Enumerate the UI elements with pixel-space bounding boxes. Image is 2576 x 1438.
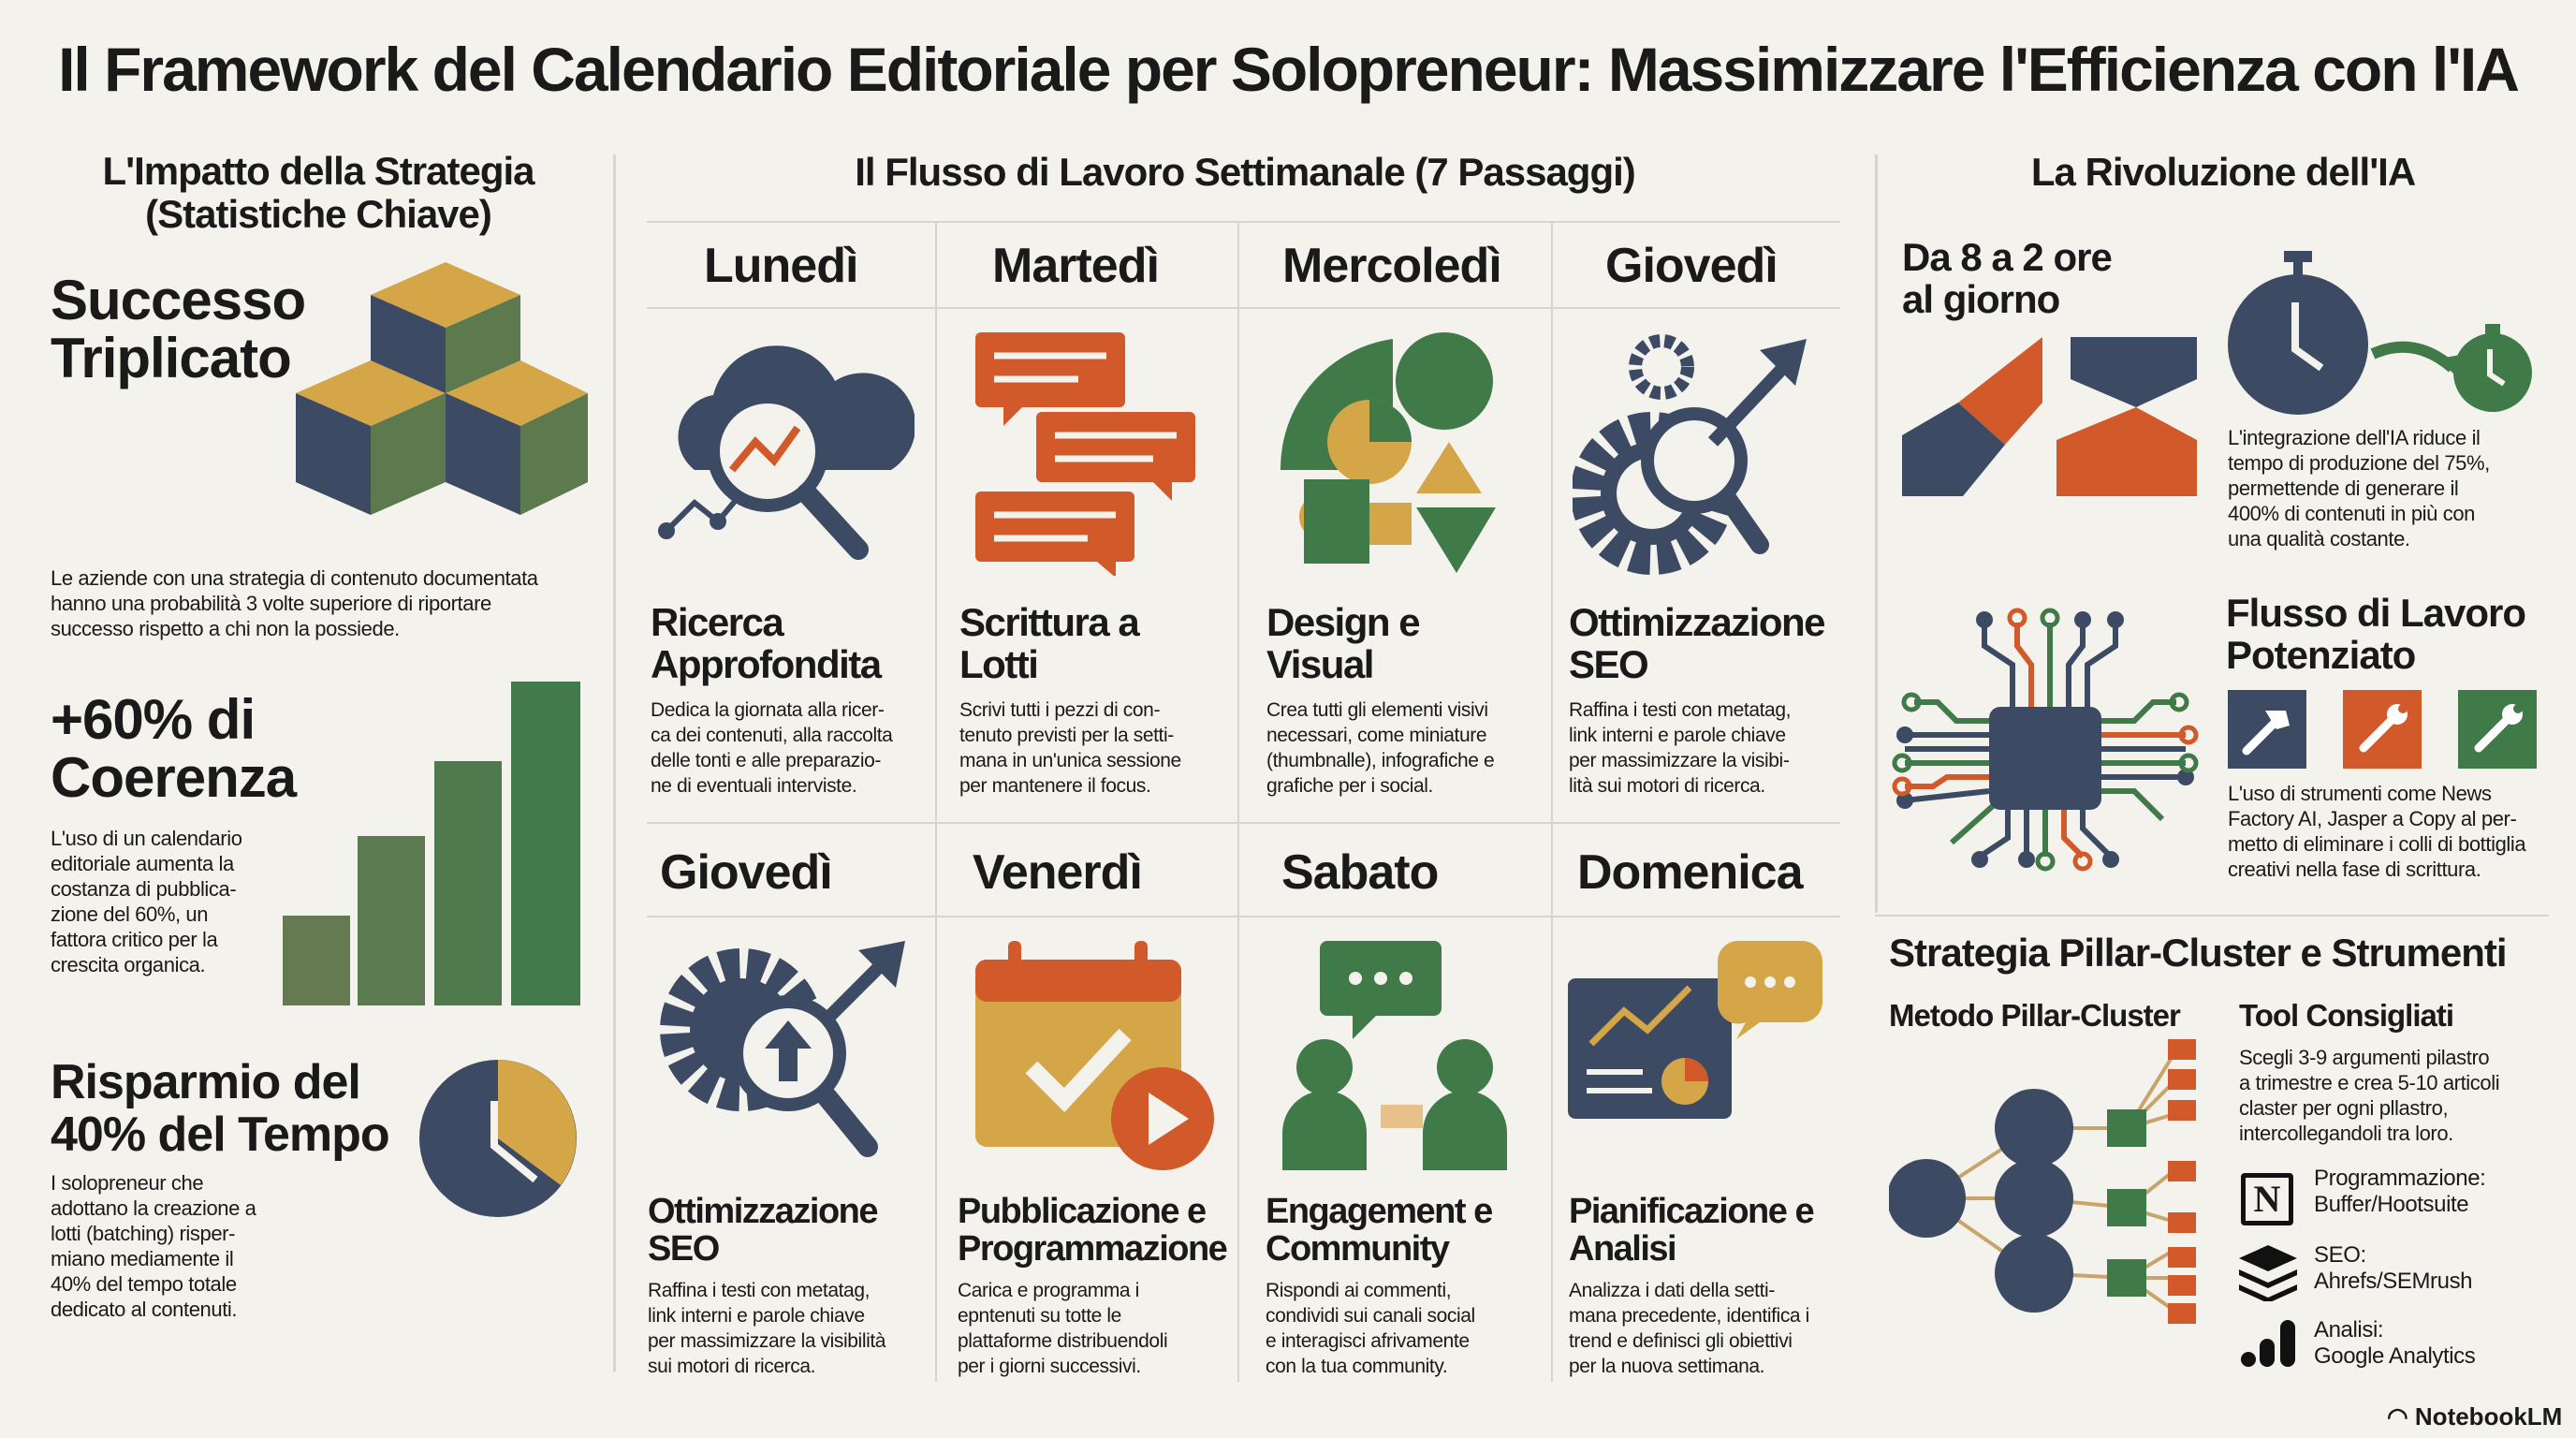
step titles row 1 <box>651 600 882 686</box>
text: IA riduce: L'integrazione dell'IA riduce il <box>2228 426 2481 449</box>
panel: weekly workflow: mana in un'unica sessione <box>959 750 1181 771</box>
step texts row 2: sui motori di ricerca. <box>648 1356 815 1377</box>
step texts row 1: ne di eventuali interviste. <box>651 775 856 797</box>
icon: analytics chat <box>1568 941 1822 1119</box>
panel: weekly workflow: lità sui motori di ricerca. <box>1569 775 1765 797</box>
tool list: Ahrefs/SEMrush <box>2314 1269 2472 1294</box>
panel: weekly workflow: necessari, come miniature <box>1266 725 1486 746</box>
text: coerenza: zione del 60%, un <box>51 902 208 926</box>
panel: weekly workflow: link interni e parole chiave <box>1569 725 1786 746</box>
heading: impatto <box>102 149 535 236</box>
text: successo: hanno una probabilità 3 volte superiore di riportare <box>51 592 491 615</box>
heading: flusso potenziato: Potenziato <box>2226 633 2415 677</box>
icon: gear seo <box>1573 334 1807 575</box>
step texts row 1: ca dei contenuti, alla raccolta <box>651 725 892 746</box>
heading: impatto: L'Impatto della Strategia <box>102 149 534 193</box>
panel: weekly workflow: per i giorni successivi. <box>958 1356 1141 1377</box>
panel: left stats <box>51 149 588 1321</box>
text: risparmio: I solopreneur che <box>51 1171 203 1195</box>
icon: stopwatches <box>2228 251 2532 415</box>
text: strumenti: creativi nella fase di scrittura. <box>2228 858 2481 881</box>
panel: weekly workflow: e interagisci afrivamente <box>1266 1330 1470 1352</box>
stat: successo triplicato: Triplicato <box>51 327 291 389</box>
text: coerenza: crescita organica. <box>51 953 205 976</box>
text: strumenti: L'uso di strumenti come News <box>2228 782 2492 805</box>
panel: weekly workflow: mana precedente, identifica i <box>1569 1305 1809 1327</box>
step texts row 2: link interni e parole chiave <box>648 1305 865 1327</box>
text: risparmio: dedicato al contenuti. <box>51 1298 237 1321</box>
icon: community <box>1282 941 1507 1170</box>
bar chart <box>283 682 580 1005</box>
panel: weekly workflow: Visual <box>1266 642 1373 686</box>
panel: weekly workflow: con la tua community. <box>1266 1356 1447 1377</box>
stat: risparmio: Risparmio del <box>51 1055 360 1109</box>
step titles row 1: Ricerca <box>651 600 783 644</box>
panel: weekly workflow: Programmazione <box>958 1229 1226 1269</box>
panel: AI revolution <box>1893 150 2537 881</box>
panel: weekly workflow: Design e <box>1266 600 1419 644</box>
icon: layers <box>2239 1245 2297 1301</box>
panel: weekly workflow: tenuto previsti per la setti- <box>959 725 1174 746</box>
panel: weekly workflow: Engagement e <box>1266 1192 1492 1231</box>
title: Il Framework del Calendario Editoriale per Solopreneur: Massimizzare l'Efficienza con l'IA <box>58 35 2518 104</box>
text: IA riduce: tempo di produzione del 75%, <box>2228 451 2490 475</box>
text: risparmio: adottano la creazione a <box>51 1196 256 1220</box>
logo: NotebookLM: ◠ NotebookLM <box>2387 1402 2562 1431</box>
step texts row 2 <box>648 1280 886 1377</box>
text: successo: successo rispetto a chi non la possiede. <box>51 617 400 640</box>
panel: weekly workflow: Scrivi tutti i pezzi di con- <box>959 699 1160 721</box>
step titles row 2 <box>648 1192 878 1269</box>
day headers row 1: Giovedì <box>1605 239 1778 293</box>
heading: impatto: (Statistiche Chiave) <box>145 192 491 236</box>
text: IA riduce: una qualità costante. <box>2228 527 2410 550</box>
text: pillar: intercollegandoli tra loro. <box>2239 1122 2453 1145</box>
icon: cubes <box>296 262 588 515</box>
panel: weekly workflow: Analizza i dati della setti- <box>1569 1280 1775 1301</box>
subheading: metodo: Metodo Pillar-Cluster <box>1889 998 2180 1033</box>
day headers row 1 <box>704 239 1778 293</box>
icon: hourglass shapes <box>1902 337 2197 496</box>
icon: analytics bars <box>2241 1320 2299 1367</box>
panel: pillar-cluster <box>1889 931 2507 1369</box>
icon: design shapes <box>1281 332 1496 573</box>
stat: risparmio: 40% del Tempo <box>51 1108 389 1162</box>
panel: weekly workflow: per massimizzare la visibi- <box>1569 750 1789 771</box>
day headers row 1: Martedì <box>992 239 1159 293</box>
icon: chip <box>1893 609 2198 871</box>
icon: notion: N <box>2254 1178 2280 1220</box>
subheading: tool consigliati: Tool Consigliati <box>2239 998 2453 1033</box>
step texts row 2: per massimizzare la visibilità <box>648 1330 886 1352</box>
step titles row 2: SEO <box>648 1229 719 1269</box>
icon: gear magnifier <box>660 941 905 1157</box>
text: coerenza: editoriale aumenta la <box>51 852 234 875</box>
panel: weekly workflow: Rispondi ai commenti, <box>1266 1280 1451 1301</box>
day headers row 2: Sabato <box>1281 845 1438 900</box>
stat: coerenza <box>51 688 298 809</box>
panel: weekly workflow: Lotti <box>959 642 1037 686</box>
heading: flusso potenziato: Flusso di Lavoro <box>2226 591 2525 635</box>
step texts row 1: delle tonti e alle preparazio- <box>651 750 881 771</box>
text: coerenza: L'uso di un calendario <box>51 827 242 850</box>
icon: cloud research <box>658 345 915 560</box>
panel: weekly workflow: grafiche per i social. <box>1266 775 1433 797</box>
icon: calendar publish <box>975 941 1214 1170</box>
text: pillar <box>2239 1046 2499 1145</box>
text: risparmio <box>51 1171 256 1321</box>
panel: weekly workflow: SEO <box>1569 642 1647 686</box>
stat: risparmio <box>51 1055 389 1162</box>
icon: chat bubbles <box>975 332 1195 576</box>
heading: flusso: Il Flusso di Lavoro Settimanale (7 Passaggi) <box>855 150 1635 194</box>
heading: strategia pillar: Strategia Pillar-Cluster e Strumenti <box>1889 931 2507 975</box>
text: pillar: a trimestre e crea 5-10 articoli <box>2239 1071 2499 1094</box>
heading: flusso potenziato <box>2226 591 2525 677</box>
step texts row 2: Raffina i testi con metatag, <box>648 1280 870 1301</box>
panel: weekly workflow: Crea tutti gli elementi visivi <box>1266 699 1488 721</box>
panel: weekly workflow: Analisi <box>1569 1229 1676 1269</box>
panel: weekly workflow: Scrittura a <box>959 600 1138 644</box>
stat: 8 a 2 ore <box>1902 235 2112 321</box>
panel: weekly workflow: epntenuti su totte le <box>958 1305 1121 1327</box>
text: IA riduce: permettende di generare il <box>2228 477 2458 500</box>
step texts row 1 <box>651 699 893 797</box>
panel: weekly workflow: Pianificazione e <box>1569 1192 1813 1231</box>
text: coerenza: fattora critico per la <box>51 928 217 951</box>
panel: weekly workflow: Community <box>1266 1229 1449 1269</box>
text: IA riduce: 400% di contenuti in più con <box>2228 502 2475 525</box>
icon: pie clock <box>419 1060 577 1217</box>
step titles row 1: Approfondita <box>651 642 881 686</box>
text: coerenza: costanza di pubblica- <box>51 877 236 901</box>
stat: successo triplicato: Successo <box>51 269 305 331</box>
text: risparmio: lotti (batching) risper- <box>51 1222 235 1245</box>
panel: weekly workflow: Pubblicazione e <box>958 1192 1206 1231</box>
panel: weekly workflow: Carica e programma i <box>958 1280 1139 1301</box>
day headers row 2: Domenica <box>1577 845 1803 900</box>
text: IA riduce <box>2228 426 2490 550</box>
panel: weekly workflow: trend e definisci gli obiettivi <box>1569 1330 1793 1352</box>
stat: 8 a 2 ore: Da 8 a 2 ore <box>1902 235 2112 279</box>
text: pillar: claster per ogni pllastro, <box>2239 1096 2448 1120</box>
stat: coerenza: +60% di <box>51 688 255 751</box>
tool list: SEO: <box>2314 1242 2366 1268</box>
panel: weekly workflow <box>647 150 1840 1382</box>
step texts row 1: Dedica la giornata alla ricer- <box>651 699 884 721</box>
panel: weekly workflow: condividi sui canali social <box>1266 1305 1475 1327</box>
panel: weekly workflow: plattaforme distribuendoli <box>958 1330 1167 1352</box>
day headers row 2: Giovedì <box>660 845 832 900</box>
tool list: Google Analytics <box>2314 1343 2475 1369</box>
icons: tools <box>2228 690 2537 769</box>
step titles row 2: Ottimizzazione <box>648 1192 877 1231</box>
text: pillar: Scegli 3-9 argumenti pilastro <box>2239 1046 2489 1069</box>
tool list: Analisi: <box>2314 1317 2383 1343</box>
panel: weekly workflow: per la nuova settimana. <box>1569 1356 1764 1377</box>
heading: rivoluzione: La Rivoluzione dell'IA <box>2031 150 2415 194</box>
text: coerenza <box>51 827 242 976</box>
text: strumenti <box>2228 782 2526 881</box>
day headers row 2 <box>660 845 1804 900</box>
diagram: pillar cluster <box>1889 1039 2196 1324</box>
stat: successo triplicato <box>51 269 305 389</box>
text: strumenti: Factory AI, Jasper a Copy al per- <box>2228 807 2516 830</box>
text: risparmio: miano mediamente il <box>51 1247 233 1270</box>
day headers row 1: Lunedì <box>704 239 857 293</box>
panel: weekly workflow: per mantenere il focus. <box>959 775 1150 797</box>
panel: weekly workflow: Raffina i testi con metatag, <box>1569 699 1791 721</box>
day headers row 1: Mercoledì <box>1282 239 1501 293</box>
tool list <box>2239 1166 2485 1369</box>
text: successo: Le aziende con una strategia di contenuto documentata <box>51 566 538 590</box>
text: strumenti: metto di eliminare i colli di bottiglia <box>2228 832 2525 856</box>
text: successo <box>51 566 538 640</box>
panel: weekly workflow: (thumbnalle), infografiche e <box>1266 750 1494 771</box>
stat: 8 a 2 ore: al giorno <box>1902 277 2059 321</box>
icon: notion <box>2241 1173 2293 1225</box>
text: risparmio: 40% del tempo totale <box>51 1272 237 1296</box>
day headers row 2: Venerdì <box>973 845 1142 900</box>
tool list: Programmazione: <box>2314 1166 2485 1191</box>
tool list: Buffer/Hootsuite <box>2314 1192 2468 1217</box>
stat: coerenza: Coerenza <box>51 746 296 809</box>
panel: weekly workflow: Ottimizzazione <box>1569 600 1824 644</box>
